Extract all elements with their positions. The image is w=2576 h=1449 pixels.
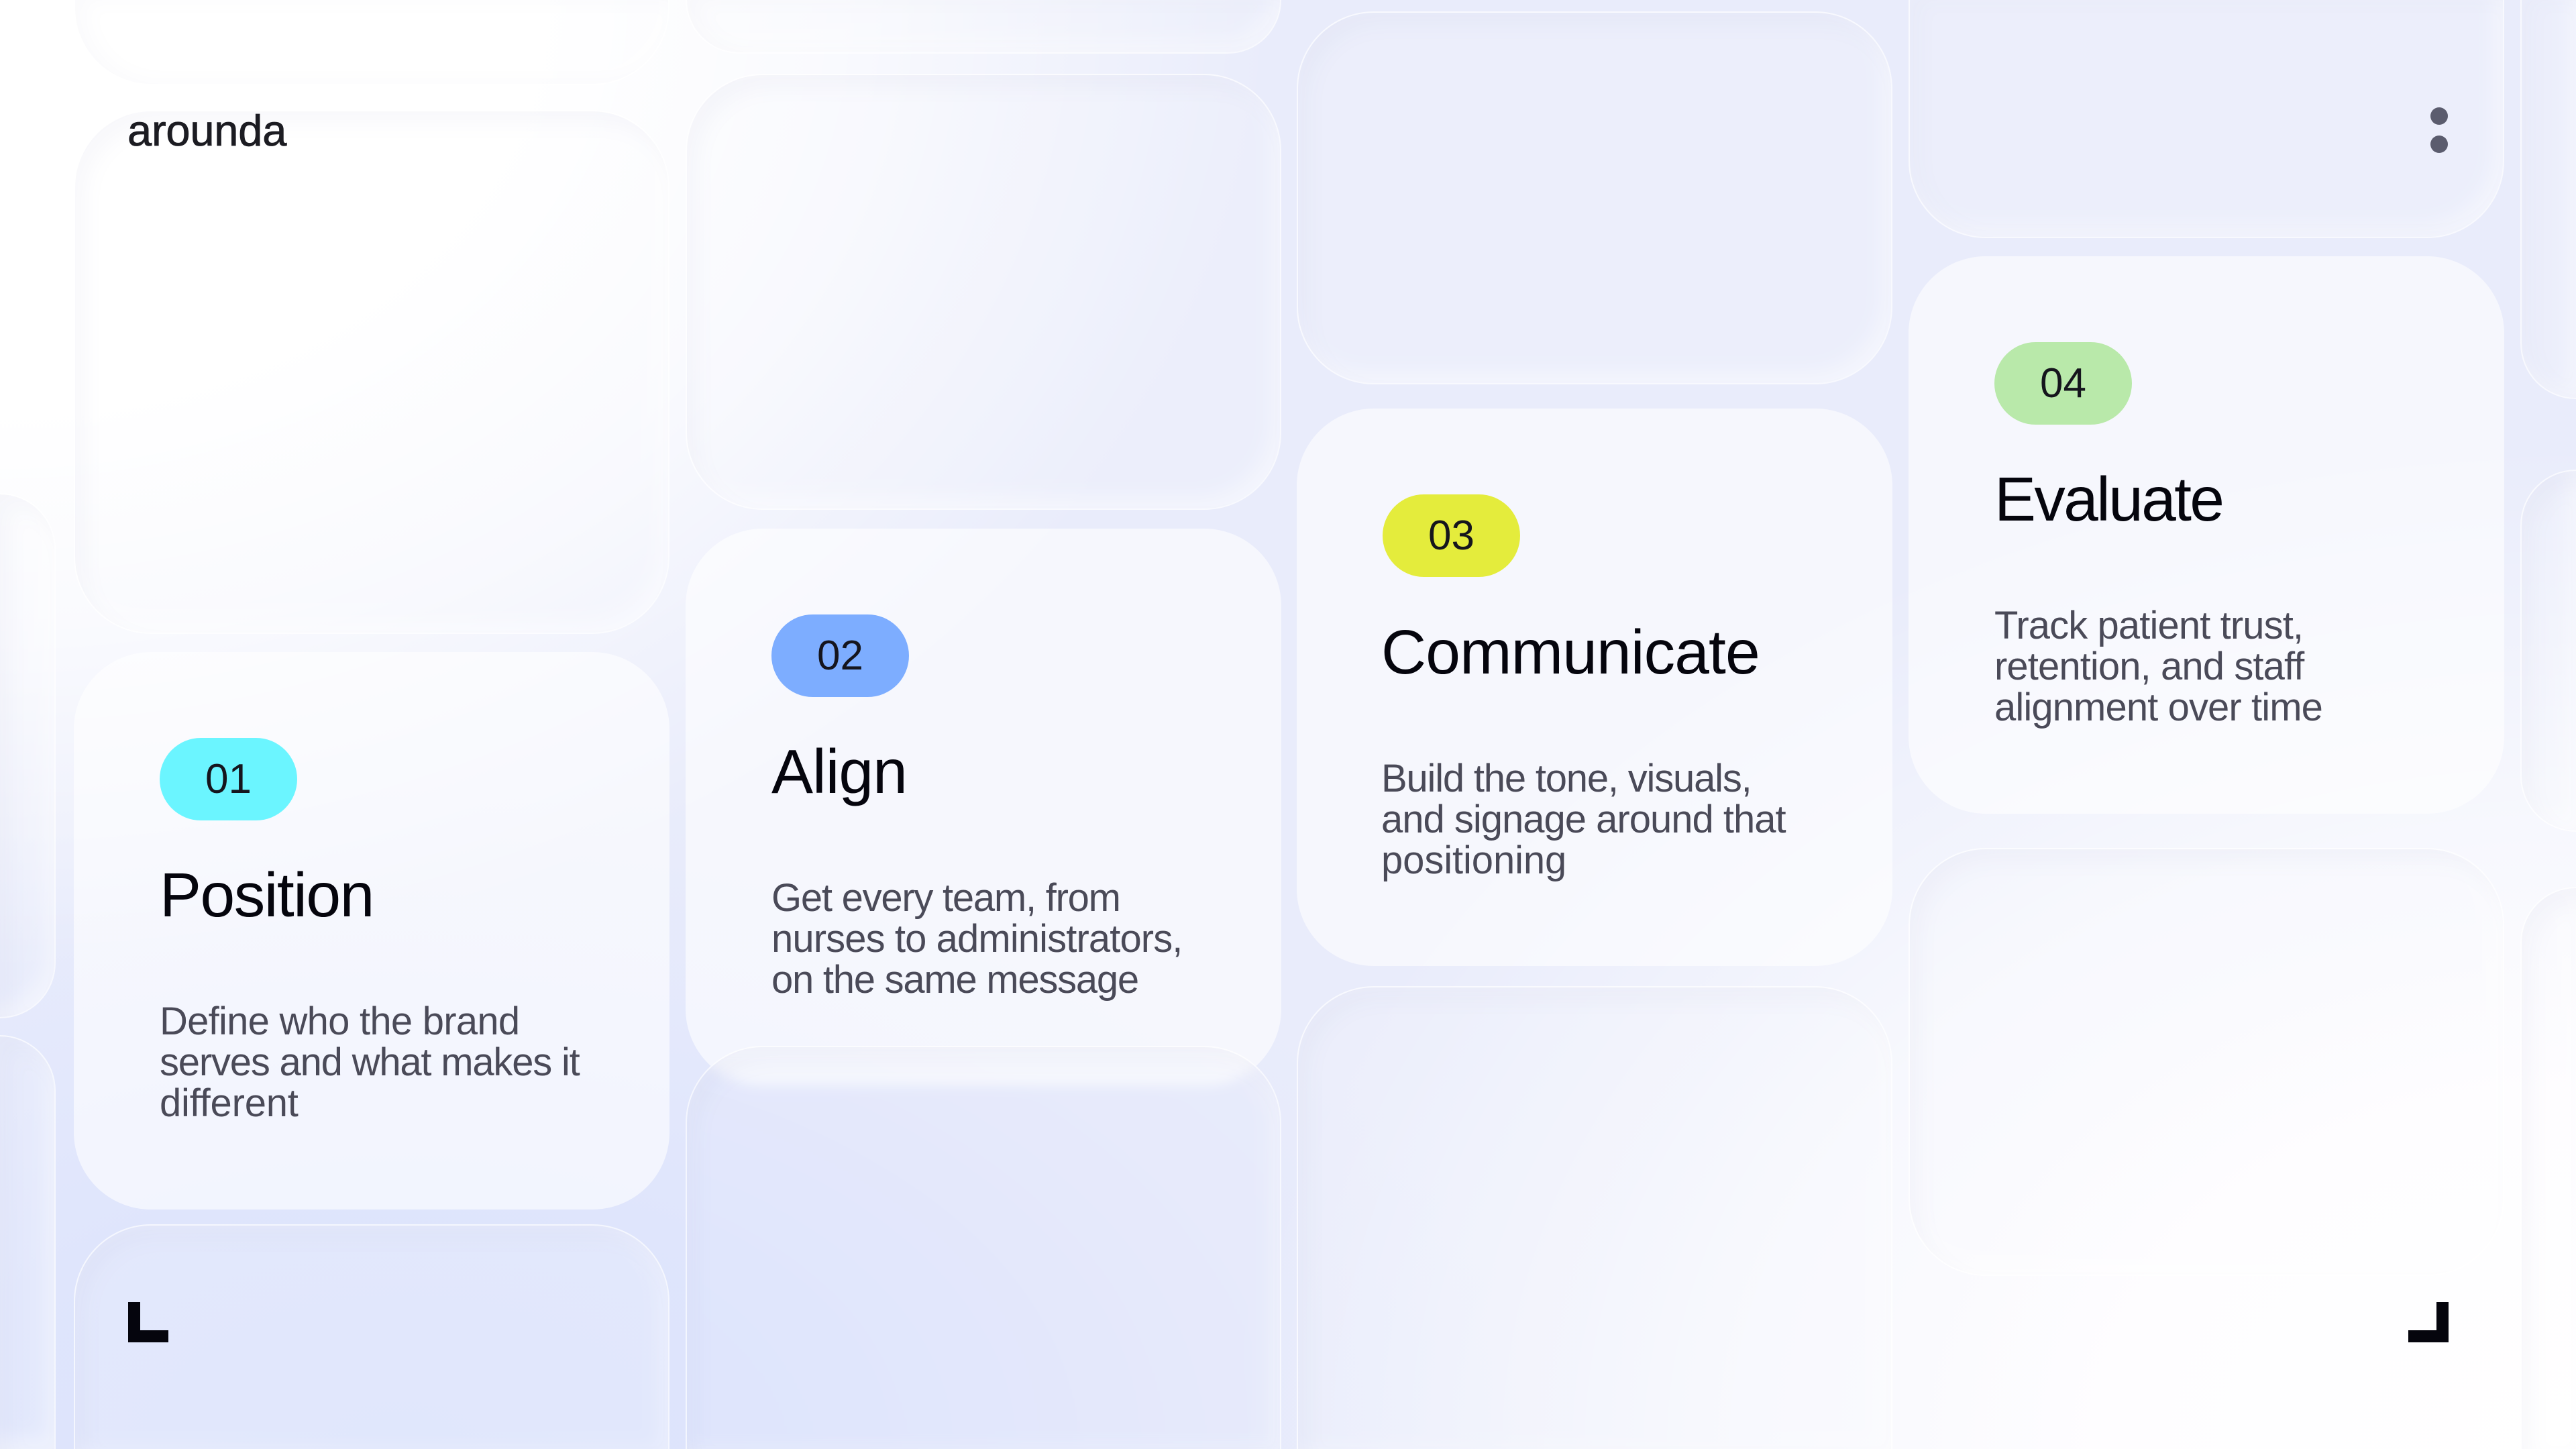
background tile: column 0 lower [0, 1035, 56, 1449]
badge 04: 04 [2040, 360, 2086, 407]
heading: Communicate: Communicate [1381, 617, 1760, 687]
panel: step 04 Evaluate [1909, 256, 2504, 814]
text: Position description: different [160, 1081, 299, 1125]
background tile: column 2 top [686, 0, 1281, 54]
background tile: column 0 middle [0, 493, 56, 1018]
background tile: column 1 top [74, 0, 669, 85]
icon: bottom-left corner bracket [128, 1302, 168, 1342]
text: Evaluate description: alignment over time [1994, 686, 2322, 729]
text: Evaluate description: retention, and staff [1994, 645, 2304, 688]
badge 02 [771, 614, 909, 697]
badge 01: 01 [205, 756, 252, 802]
background tile: column 3 bottom [1297, 986, 1892, 1449]
text: Position description: Define who the brand [160, 1000, 519, 1043]
background tile: column 4 top [1909, 0, 2504, 238]
text: Communicate description: positioning [1381, 839, 1566, 882]
badge 03 [1383, 494, 1520, 577]
text: Evaluate description: Track patient trust, [1994, 604, 2303, 647]
text: Align description: nurses to administrators, [771, 917, 1183, 961]
text: Evaluate description [1994, 604, 2322, 729]
badge 04 [1994, 342, 2132, 425]
icon: bottom-right corner bracket [2408, 1302, 2449, 1342]
badge 02: 02 [817, 633, 863, 679]
badge 03: 03 [1428, 513, 1474, 559]
panel: step 02 Align [686, 529, 1281, 1086]
panel: step 03 Communicate [1297, 409, 1892, 966]
panel: step 01 Position [74, 652, 669, 1210]
background tile: column 2 bottom, frosted over card 02 [686, 1046, 1281, 1449]
text: Position description [160, 1000, 580, 1125]
background tile: column 1 upper [74, 110, 669, 634]
heading: Evaluate: Evaluate [1994, 464, 2222, 534]
heading: Position: Position [160, 860, 374, 930]
heading: Align: Align [771, 737, 907, 806]
text: Communicate description [1381, 757, 1786, 882]
text: Align description: Get every team, from [771, 876, 1120, 920]
background tile: column 3 upper [1297, 11, 1892, 384]
text: Position description: serves and what makes it [160, 1040, 580, 1084]
background tile: column 4 bottom [1909, 848, 2504, 1276]
background tile: column 5 top [2520, 0, 2576, 399]
icon: two dots menu [2430, 107, 2448, 153]
background tile: column 5 middle [2520, 470, 2576, 832]
background tile: column 2 upper [686, 74, 1281, 510]
background tile: column 1 bottom [74, 1224, 669, 1449]
logo: arounda: arounda [127, 106, 286, 155]
text: Align description [771, 876, 1183, 1002]
background tile: column 5 bottom [2520, 887, 2576, 1449]
badge 01 [160, 738, 297, 820]
text: Communicate description: and signage around that [1381, 798, 1786, 841]
text: Align description: on the same message [771, 958, 1138, 1002]
text: Communicate description: Build the tone, visuals, [1381, 757, 1752, 800]
